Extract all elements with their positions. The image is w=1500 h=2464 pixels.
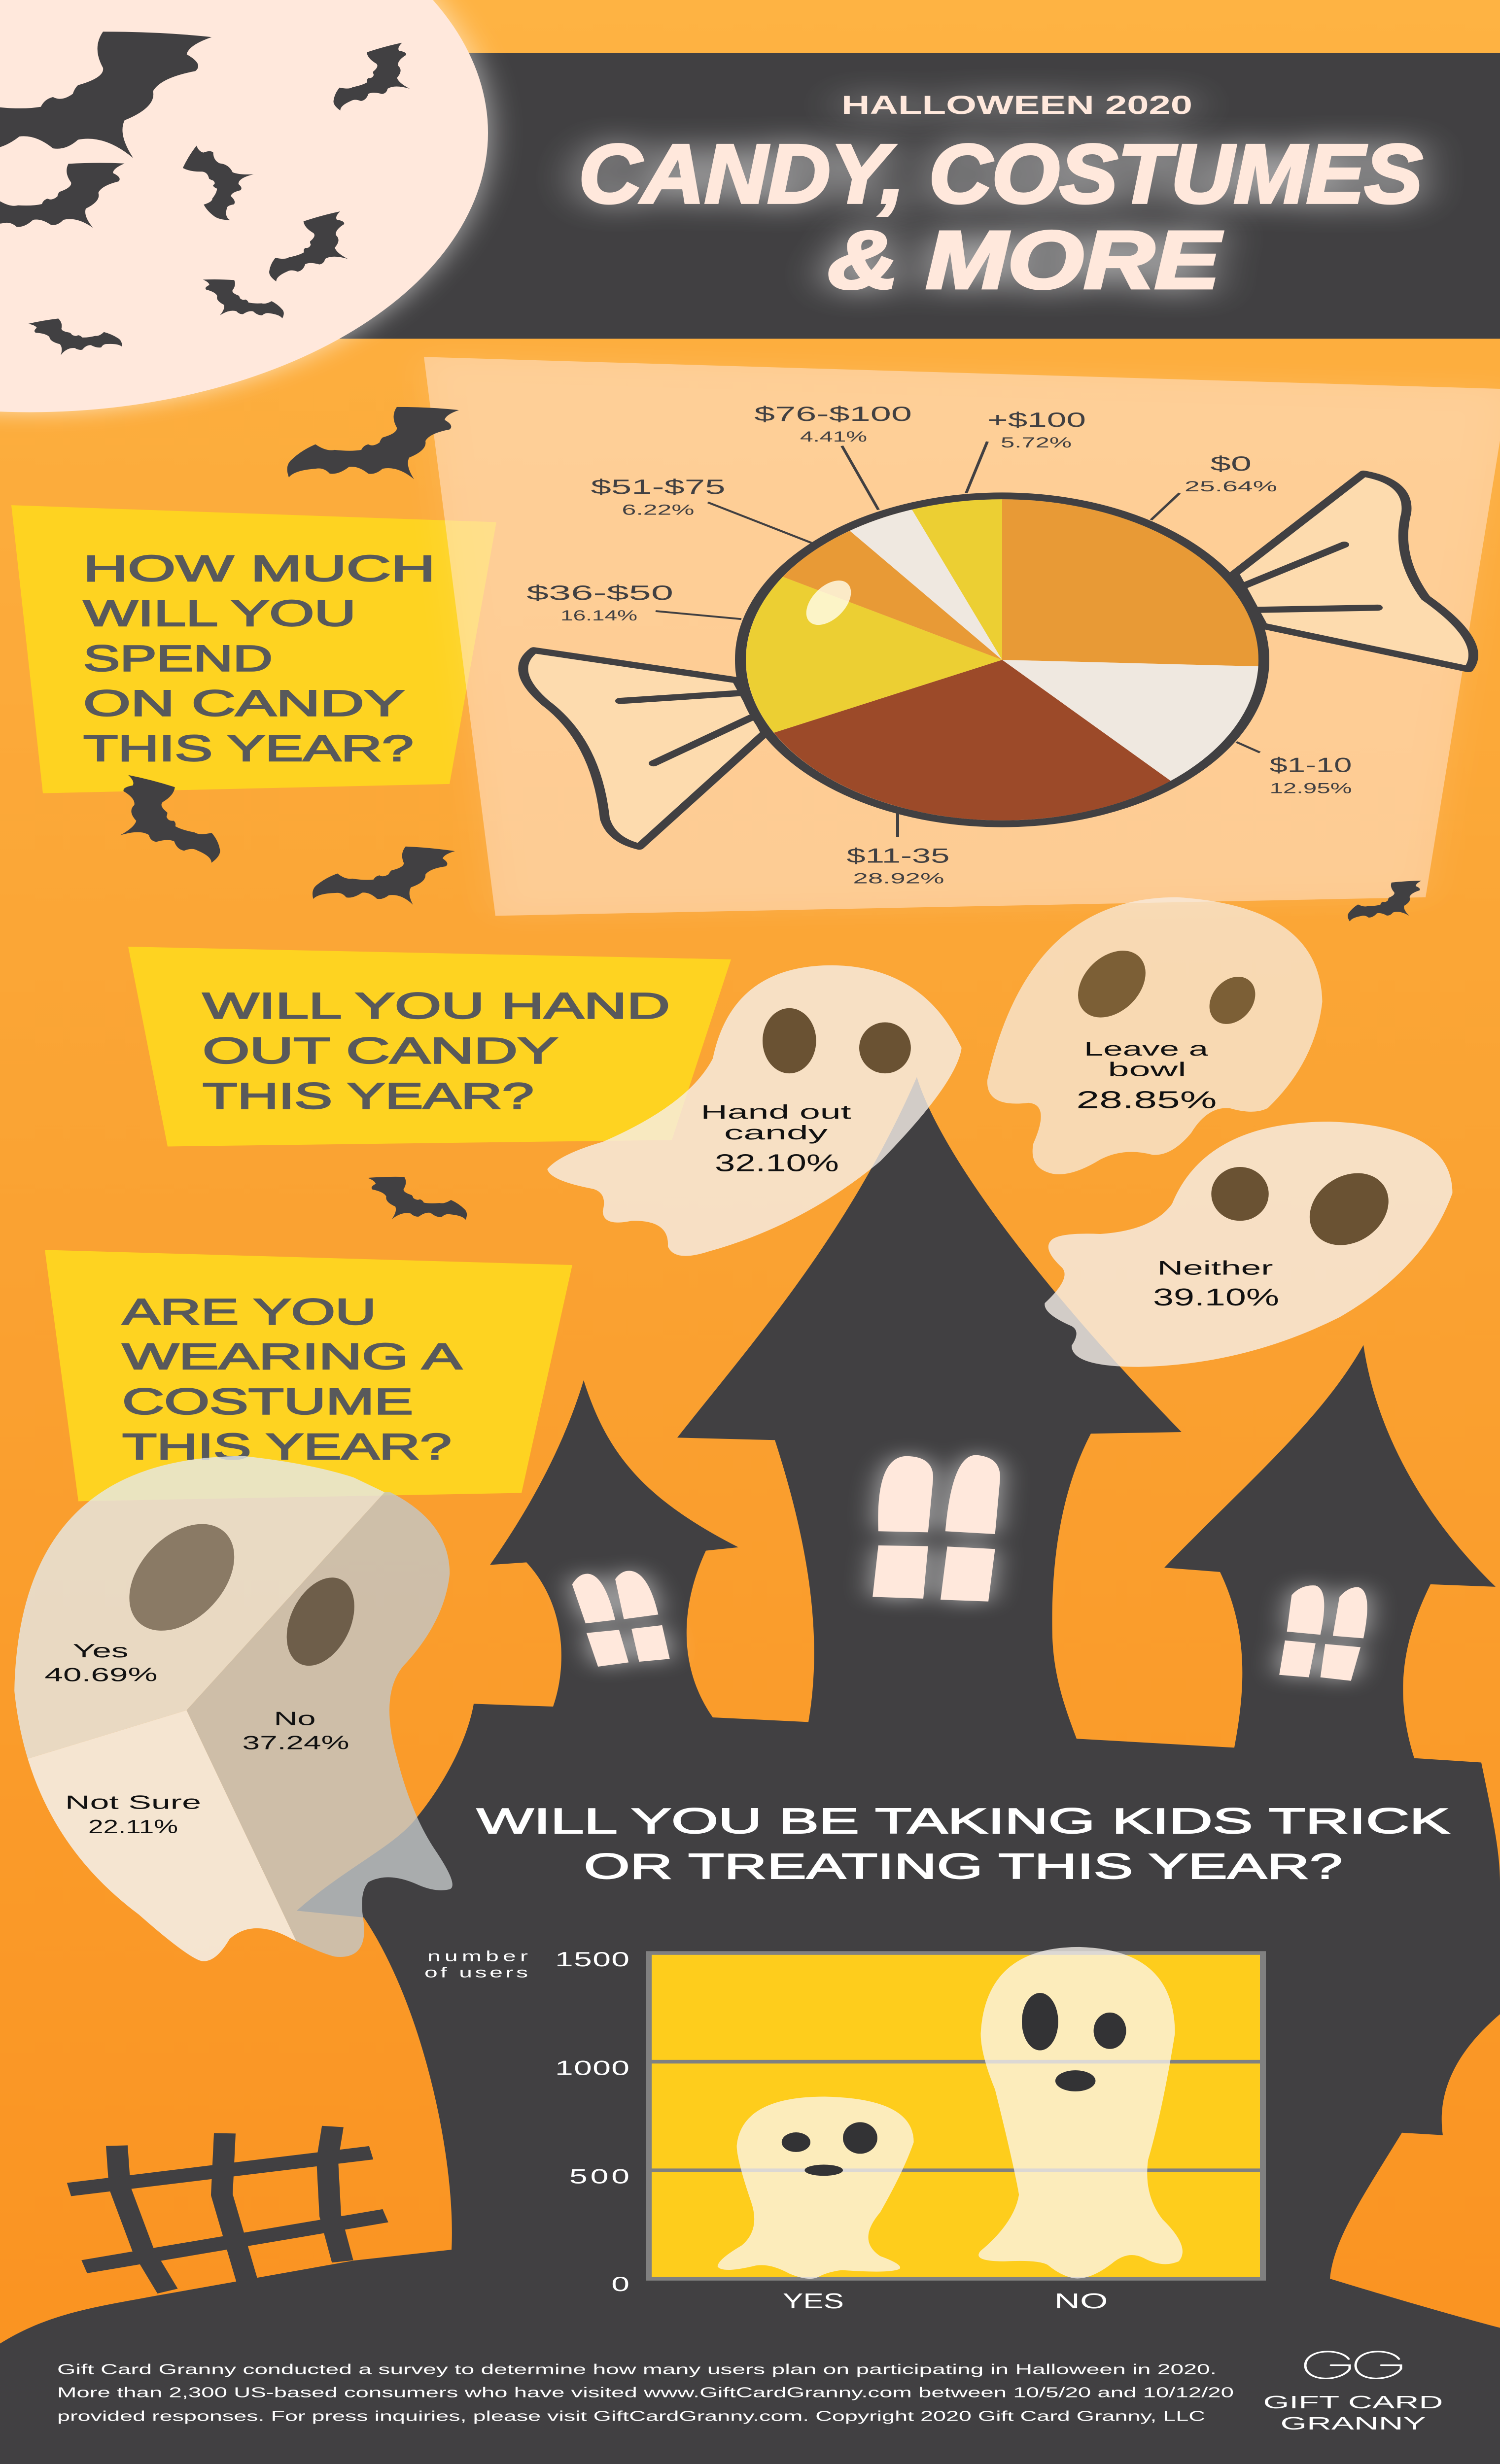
label: no	[242, 1708, 349, 1753]
label: hand out candy: candy	[724, 1122, 828, 1144]
bar ghost: no	[978, 1947, 1183, 2278]
candy highlight	[797, 577, 860, 629]
grid lines	[649, 2062, 1263, 2170]
ghost eye right	[277, 1576, 364, 1667]
label: leave a bowl	[1077, 1038, 1217, 1113]
question box: costume	[45, 1250, 572, 1501]
ghost eye right	[1301, 1172, 1397, 1247]
label: $76-$100: 4.41%	[800, 429, 867, 445]
ghost face	[782, 2122, 877, 2176]
candy panel	[424, 357, 1500, 916]
label: leave a bowl: 28.85%	[1077, 1086, 1217, 1113]
footer text: provided responses. For press inquiries, please visit GiftCardGranny.com. Copyright 2020 Gift Card Granny, LLC	[57, 2408, 1205, 2424]
label: yes	[45, 1640, 158, 1685]
label: hand out candy: Hand out	[701, 1101, 851, 1123]
icon: large bat	[0, 32, 212, 158]
label: +$100: +$100	[987, 408, 1086, 431]
heading: trick or treating: WILL YOU BE TAKING KIDS TRICK	[477, 1801, 1450, 1841]
label: leave a bowl: Leave a	[1084, 1038, 1208, 1060]
label: $36-$50: $36-$50	[526, 581, 673, 604]
label: $0	[1185, 452, 1277, 495]
window: right tower	[1279, 1585, 1367, 1681]
icon: bat lower right	[242, 209, 373, 283]
label: +$100	[987, 408, 1086, 451]
label: $76-$100	[754, 402, 912, 445]
ghost body	[547, 965, 962, 1256]
slice: no	[186, 1492, 453, 1957]
label: $11-35: $11-35	[847, 844, 950, 867]
footer text: More than 2,300 US-based consumers who have visited www.GiftCardGranny.com between 10/5/20 and 10/12/20	[57, 2385, 1234, 2400]
heading: will you hand out candy: THIS YEAR?	[203, 1076, 534, 1116]
label: $0: $0	[1210, 452, 1252, 475]
label: neither: 39.10%	[1153, 1284, 1279, 1311]
heading: will you hand out candy: OUT CANDY	[203, 1030, 558, 1071]
ghost eye left	[1211, 1167, 1269, 1221]
ghost body	[1045, 1122, 1452, 1367]
label: not sure: 22.11%	[88, 1816, 178, 1837]
heading: are you wearing a costume: THIS YEAR?	[122, 1426, 452, 1467]
plot area	[649, 1953, 1263, 2279]
icon: bat lower left	[312, 843, 455, 906]
label: $51-$75	[591, 475, 726, 518]
label: neither: Neither	[1157, 1257, 1273, 1279]
question box: how much	[11, 505, 496, 793]
label: $51-$75: $51-$75	[591, 475, 726, 498]
label: $0: 25.64%	[1185, 479, 1277, 495]
header band	[246, 53, 1500, 339]
x axis labels	[783, 2289, 1108, 2313]
heading: how much will you spend: SPEND	[83, 638, 273, 679]
label: hand out candy: 32.10%	[715, 1149, 839, 1176]
footer text	[57, 2361, 1234, 2424]
label: $36-$50: 16.14%	[560, 607, 637, 624]
y axis labels: 1500	[555, 1948, 629, 1971]
label: yes: Yes	[73, 1640, 128, 1661]
heading: are you wearing a costume: COSTUME	[122, 1381, 413, 1422]
label: $1-10: 12.95%	[1269, 780, 1352, 796]
question box: hand out candy	[128, 947, 731, 1146]
title line 2: & MORE	[828, 214, 1222, 306]
label: $51-$75: 6.22%	[622, 502, 695, 518]
icon: bat upper right	[307, 41, 434, 112]
pie slice: +$100	[912, 499, 1002, 660]
leader lines	[656, 442, 1260, 837]
label: no: 37.24%	[242, 1732, 349, 1753]
ghost eye left	[763, 1008, 816, 1073]
icon: bat lower centre	[198, 278, 289, 319]
pie slice: $51-$75	[783, 531, 1002, 660]
label: $11-35: 28.92%	[853, 870, 944, 887]
label: no: No	[274, 1708, 315, 1729]
ghost eye left	[112, 1521, 252, 1633]
x axis labels: NO	[1054, 2289, 1108, 2313]
window: centre tower	[872, 1455, 1000, 1602]
pie slice: $1-10	[1002, 660, 1258, 781]
label: $1-10: $1-10	[1269, 753, 1352, 776]
heading: how much will you spend: WILL YOU	[83, 593, 356, 634]
logo mark	[1305, 2352, 1401, 2378]
moon bats	[0, 32, 434, 358]
heading: trick or treating	[477, 1801, 1450, 1886]
ghost: hand out candy	[547, 965, 962, 1256]
y axis labels	[555, 1948, 629, 2295]
pie slice: $0	[1002, 499, 1258, 666]
ghost face	[1022, 1993, 1126, 2091]
icon: bat under question box	[88, 773, 254, 864]
ghost slices	[14, 1456, 453, 1961]
candy pie chart	[523, 402, 1473, 887]
icon: bat on panel edge	[287, 407, 459, 479]
y axis labels: 500	[569, 2165, 629, 2188]
ghost body	[718, 2097, 914, 2279]
pie outline	[740, 496, 1264, 824]
ghost: neither	[1045, 1122, 1452, 1367]
y axis labels: 0	[611, 2273, 629, 2295]
label: leave a bowl: bowl	[1108, 1059, 1186, 1081]
ghost: leave a bowl	[987, 897, 1322, 1174]
heading: will you hand out candy	[203, 986, 670, 1116]
header text	[579, 91, 1423, 306]
ghost: costume chart	[14, 1456, 453, 1961]
graveyard fence	[69, 2126, 385, 2291]
heading: how much will you spend: ON CANDY	[83, 683, 405, 723]
icon: bat centre	[164, 145, 262, 221]
label: $1-10	[1269, 753, 1352, 796]
icon: bat mid left	[365, 1176, 469, 1221]
x axis labels: YES	[783, 2289, 844, 2313]
logo: Gift Card Granny	[1263, 2352, 1443, 2433]
logo name: GIFT CARD	[1263, 2393, 1443, 2412]
icon: bat bottom left	[28, 312, 123, 358]
heading: how much will you spend: THIS YEAR?	[83, 728, 414, 769]
window: left tower	[572, 1571, 670, 1667]
pie slice: $36-$50	[746, 577, 1002, 733]
moon	[0, 0, 488, 412]
y axis labels: 1000	[555, 2056, 629, 2080]
slice: not sure	[28, 1710, 296, 1961]
glowing house windows	[572, 1455, 1367, 1681]
ghost eye right	[1204, 976, 1261, 1025]
label: not sure: Not Sure	[65, 1791, 201, 1813]
label: neither	[1153, 1257, 1279, 1311]
logo: Gift Card Granny: GRANNY	[1281, 2414, 1426, 2433]
heading: how much will you spend	[83, 548, 435, 769]
axis title: of users	[424, 1964, 528, 1981]
ghost eye left	[1068, 949, 1156, 1019]
label: hand out candy	[701, 1101, 851, 1176]
heading: how much will you spend: HOW MUCH	[83, 548, 435, 589]
label: not sure	[65, 1791, 201, 1837]
ghost eye right	[859, 1023, 911, 1073]
heading: are you wearing a costume: WEARING A	[122, 1336, 462, 1377]
ghost body	[987, 897, 1322, 1174]
label: +$100: 5.72%	[1001, 435, 1072, 451]
axis title	[424, 1948, 528, 1981]
ghost body	[978, 1947, 1183, 2278]
label: yes: 40.69%	[45, 1664, 158, 1685]
axis title: number	[427, 1948, 528, 1964]
icon: bat panel corner	[1340, 879, 1430, 923]
bar ghost: yes	[718, 2097, 914, 2279]
label: $36-$50	[526, 581, 673, 624]
haunted house silhouette	[0, 1077, 1500, 2464]
icon: bat left edge	[0, 161, 133, 234]
heading: will you hand out candy: WILL YOU HAND	[203, 986, 670, 1026]
footer text: Gift Card Granny conducted a survey to determine how many users plan on participating in Halloween in 2020.	[57, 2361, 1217, 2377]
pie slice: $11-35	[774, 660, 1171, 821]
candy wrapper left	[523, 650, 766, 847]
bar chart: trick or treating	[424, 1947, 1263, 2313]
label: $11-35	[847, 844, 949, 887]
pie slice: $76-$100	[850, 510, 1002, 660]
candy wrapper right	[1234, 474, 1473, 669]
slice: yes	[14, 1456, 384, 1759]
kicker: Halloween 2020: HALLOWEEN 2020	[841, 91, 1192, 119]
label: $76-$100: $76-$100	[754, 402, 912, 425]
heading: are you wearing a costume: ARE YOU	[122, 1292, 376, 1332]
heading: are you wearing a costume	[122, 1292, 462, 1467]
heading: trick or treating: OR TREATING THIS YEAR?	[584, 1846, 1343, 1886]
